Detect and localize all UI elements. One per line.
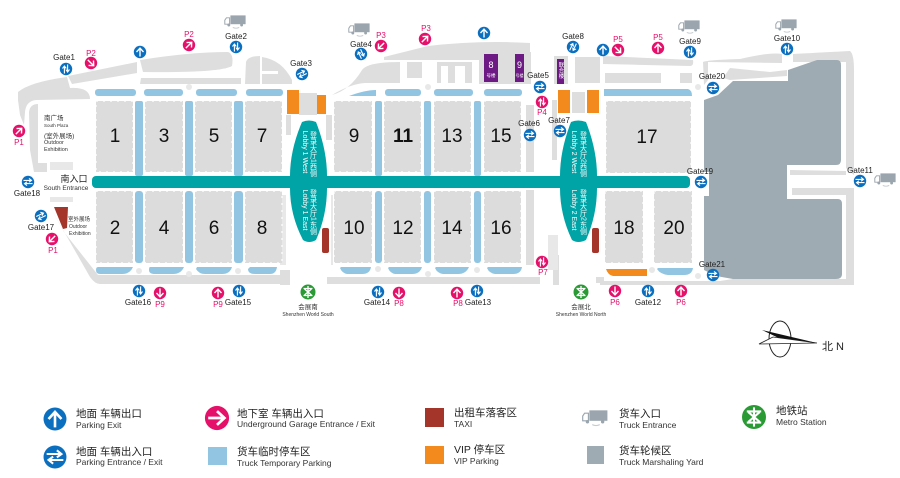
legend: parking exit: Parking Exit bbox=[76, 420, 122, 430]
purple building label bbox=[557, 59, 564, 84]
hall 13 bbox=[434, 101, 471, 172]
outdoor exhibition label: 室外展场 bbox=[68, 215, 91, 223]
garage P2 bbox=[180, 30, 198, 54]
compass: 北 N bbox=[822, 340, 844, 353]
legend: VIP parking bbox=[425, 443, 505, 466]
gate 18: Gate18 bbox=[14, 189, 41, 198]
south plaza label: (室外展场) bbox=[44, 131, 74, 140]
legend: VIP parking: VIP 停车区 bbox=[454, 443, 505, 456]
lobby 1 west label bbox=[301, 130, 317, 178]
gate 4: Gate4 bbox=[350, 40, 372, 49]
gate 15: Gate15 bbox=[225, 298, 252, 307]
garage P9: P9 bbox=[213, 300, 223, 309]
garage P6 bbox=[675, 285, 687, 307]
garage P1 bottom: P1 bbox=[48, 246, 58, 255]
gate 16: Gate16 bbox=[125, 298, 152, 307]
south plaza label: Outdoor bbox=[44, 140, 64, 146]
purple building 9 bbox=[515, 54, 524, 82]
legend: parking entrance exit: Parking Entrance / Exit bbox=[76, 457, 163, 467]
hall numbers: 1 bbox=[110, 126, 120, 147]
outdoor exhibition label bbox=[68, 215, 91, 237]
legend: truck entrance bbox=[583, 407, 677, 430]
outdoor exhibition label: Outdoor bbox=[69, 224, 87, 230]
gate 10: Gate10 bbox=[774, 34, 801, 43]
hall numbers: 17 bbox=[636, 127, 658, 148]
hall numbers: 16 bbox=[490, 218, 512, 239]
garage P3 bbox=[372, 31, 390, 55]
hall 3 bbox=[145, 101, 183, 172]
hall 10 bbox=[334, 191, 372, 263]
lobby 2 east label: 登录大厅2东侧 bbox=[580, 188, 587, 236]
truck temporary parking strips bbox=[95, 89, 693, 275]
hall numbers: 7 bbox=[257, 126, 267, 147]
garage P6: P6 bbox=[676, 298, 686, 307]
legend: metro station: 地铁站 bbox=[776, 404, 808, 417]
metro north: Shenzhen World North bbox=[556, 312, 606, 318]
gate 8: Gate8 bbox=[562, 32, 584, 41]
hall 8 bbox=[245, 191, 282, 263]
gate 20 bbox=[699, 72, 726, 94]
gate 6: Gate6 bbox=[518, 119, 540, 128]
purple building 8: 8 bbox=[488, 60, 494, 70]
hall numbers: 11 bbox=[393, 126, 413, 147]
gate 12 bbox=[635, 285, 662, 307]
garage P7: P7 bbox=[538, 268, 548, 277]
lobby 2 west label bbox=[570, 130, 587, 178]
gate 19: Gate19 bbox=[687, 167, 714, 176]
legend: metro station: Metro Station bbox=[776, 417, 827, 427]
gate 2: Gate2 bbox=[225, 32, 247, 41]
garage P9: P9 bbox=[155, 300, 165, 309]
garage P4 bbox=[536, 96, 548, 117]
hall 18 bbox=[605, 191, 643, 263]
hall numbers: 8 bbox=[257, 218, 267, 239]
metro north: 会展北 bbox=[571, 302, 591, 311]
lobby 1 east label: Lobby 1 East bbox=[301, 190, 308, 230]
gate 15 bbox=[225, 285, 252, 307]
hall 6 bbox=[195, 191, 232, 263]
gate 14 bbox=[364, 286, 391, 307]
garage P8 bbox=[451, 287, 463, 308]
hall 4 bbox=[145, 191, 183, 263]
south entrance label: South Entrance bbox=[44, 185, 89, 192]
gate 10 bbox=[774, 34, 801, 55]
gate 9: Gate9 bbox=[679, 37, 701, 46]
taxi areas bbox=[54, 207, 599, 253]
garage P8: P8 bbox=[394, 299, 404, 308]
legend: truck marshaling yard: Truck Marshaling Yard bbox=[619, 457, 704, 467]
legend: taxi: TAXI bbox=[454, 419, 472, 429]
garage P1 top bbox=[10, 122, 28, 147]
lobby 1 west label: Lobby 1 West bbox=[301, 131, 308, 173]
metro south bbox=[282, 284, 334, 318]
hall 16 bbox=[484, 191, 521, 263]
legend: VIP parking: VIP Parking bbox=[454, 456, 499, 466]
gate 3 bbox=[290, 59, 312, 82]
gate 2 bbox=[225, 32, 247, 53]
garage P9 bbox=[212, 287, 224, 309]
hall 15 bbox=[484, 101, 521, 172]
truck marshaling yard bbox=[704, 60, 842, 279]
hall 7 bbox=[245, 101, 282, 172]
hall numbers: 20 bbox=[663, 218, 685, 239]
hall numbers: 12 bbox=[392, 218, 414, 239]
south entrance label bbox=[44, 173, 89, 192]
legend: truck temporary parking: Truck Temporary Parking bbox=[237, 458, 332, 468]
gate 8 bbox=[562, 32, 584, 55]
gate 1 bbox=[53, 53, 75, 75]
hall numbers: 3 bbox=[159, 126, 169, 147]
hall numbers: 13 bbox=[441, 126, 463, 147]
gate 11: Gate11 bbox=[847, 166, 873, 175]
gate 11 bbox=[847, 166, 873, 187]
hall numbers: 6 bbox=[209, 218, 219, 239]
hall 20 bbox=[654, 191, 692, 263]
hall numbers: 18 bbox=[613, 218, 635, 239]
legend: truck temporary parking bbox=[208, 445, 332, 468]
south plaza label bbox=[44, 113, 74, 153]
gate 13: Gate13 bbox=[465, 298, 492, 307]
gate 1: Gate1 bbox=[53, 53, 75, 62]
gate 5: Gate5 bbox=[527, 71, 549, 80]
metro south: Shenzhen World South bbox=[282, 312, 334, 318]
gate 17: Gate17 bbox=[28, 223, 55, 232]
gate 17 bbox=[28, 208, 55, 232]
lobby 2 west label: Lobby 2 West bbox=[570, 131, 577, 173]
hall 5 bbox=[195, 101, 232, 172]
legend: truck marshaling yard: 货车轮候区 bbox=[619, 444, 672, 457]
garage P3: P3 bbox=[421, 24, 431, 33]
gate 13 bbox=[465, 285, 492, 307]
legend: truck temporary parking: 货车临时停车区 bbox=[237, 445, 310, 458]
garage P2 bbox=[82, 49, 100, 72]
legend: taxi: 出租车落客区 bbox=[454, 406, 517, 419]
garage P6 bbox=[609, 285, 621, 307]
gate 12: Gate12 bbox=[635, 298, 662, 307]
hall numbers: 2 bbox=[110, 218, 120, 239]
purple building label: 联合楼 bbox=[558, 61, 564, 80]
garage P9 bbox=[154, 287, 166, 309]
garage P2: P2 bbox=[86, 49, 96, 58]
garage P7 bbox=[536, 256, 548, 277]
main concourse: teal bar bbox=[92, 176, 690, 188]
hall 11 bbox=[384, 101, 421, 172]
hall 17 bbox=[606, 101, 691, 173]
truck icons bbox=[225, 15, 896, 186]
legend: parking exit bbox=[44, 407, 142, 430]
gate 7 bbox=[548, 116, 570, 137]
hall 14 bbox=[434, 191, 471, 263]
gate 18 bbox=[14, 176, 41, 198]
garage P5 bbox=[609, 35, 627, 59]
gate 3: Gate3 bbox=[290, 59, 312, 68]
garage P3: P3 bbox=[376, 31, 386, 40]
purple building 9: 号楼 bbox=[516, 72, 524, 78]
metro south: 会展南 bbox=[298, 302, 318, 311]
garage P5: P5 bbox=[653, 33, 663, 42]
lobby 2 east label bbox=[570, 188, 587, 236]
hall 2 bbox=[96, 191, 133, 263]
south plaza label: 南广场 bbox=[44, 113, 64, 122]
lobby 1 bbox=[290, 120, 327, 242]
lobby 2 bbox=[560, 120, 597, 242]
south plaza label: Exhibition bbox=[44, 147, 68, 153]
garage P2: P2 bbox=[184, 30, 194, 39]
legend: truck marshaling yard bbox=[587, 444, 704, 467]
legend: underground garage: 地下室 车辆出入口 bbox=[237, 407, 324, 420]
purple building 9: 9 bbox=[517, 60, 522, 70]
purple building 8 bbox=[484, 54, 498, 82]
hall numbers: 15 bbox=[490, 126, 512, 147]
south plaza label: South Plaza bbox=[44, 123, 69, 128]
hall 1 bbox=[96, 101, 133, 172]
legend: parking entrance exit bbox=[44, 445, 163, 468]
garage P6: P6 bbox=[610, 298, 620, 307]
gate 7: Gate7 bbox=[548, 116, 570, 125]
legend: parking exit: 地面 车辆出口 bbox=[76, 407, 142, 420]
metro north bbox=[556, 284, 606, 318]
gate 16 bbox=[125, 285, 152, 307]
garage P1 bottom bbox=[43, 230, 61, 255]
gate 21 bbox=[699, 260, 726, 281]
site map base: grey roads and grounds bbox=[18, 42, 854, 285]
legend: underground garage: Underground Garage Entrance / Exit bbox=[237, 419, 376, 429]
light grey forecourts and junction dots bbox=[50, 84, 701, 279]
hall numbers: 5 bbox=[209, 126, 219, 147]
hall 9 bbox=[334, 101, 372, 172]
garage P4: P4 bbox=[537, 108, 547, 117]
gate 9 bbox=[679, 37, 701, 58]
gate 20: Gate20 bbox=[699, 72, 726, 81]
garage P5 bbox=[652, 33, 664, 54]
gate 21: Gate21 bbox=[699, 260, 726, 269]
gate 6 bbox=[518, 119, 540, 141]
gate 14: Gate14 bbox=[364, 298, 391, 307]
lobby 2 west label: 登录大厅2西侧 bbox=[580, 130, 587, 178]
hall numbers: 9 bbox=[349, 126, 359, 147]
hall 12 bbox=[384, 191, 421, 263]
gate 19 bbox=[687, 167, 714, 188]
garage P5: P5 bbox=[613, 35, 623, 44]
legend: parking entrance exit: 地面 车辆出入口 bbox=[76, 445, 152, 458]
garage P3 bbox=[416, 24, 434, 48]
legend: taxi bbox=[425, 406, 517, 429]
garage P8: P8 bbox=[453, 299, 463, 308]
gate 4 bbox=[350, 40, 372, 62]
legend: underground garage bbox=[205, 406, 376, 430]
legend: metro station bbox=[742, 404, 827, 429]
lobby 1 west label: 登录大厅1西侧 bbox=[310, 130, 317, 178]
hall numbers: 4 bbox=[159, 218, 170, 239]
hall numbers bbox=[110, 126, 685, 239]
south entrance label: 南入口 bbox=[60, 173, 88, 184]
halls bbox=[96, 101, 692, 263]
unnamed blue exits bbox=[134, 27, 609, 58]
hall numbers: 14 bbox=[441, 218, 463, 239]
purple building 8: 号楼 bbox=[486, 72, 496, 79]
outdoor exhibition label: Exhibition bbox=[69, 231, 91, 237]
legend: truck entrance: 货车入口 bbox=[619, 407, 661, 420]
lobby 1 east label: 登录大厅1东侧 bbox=[310, 188, 317, 236]
garage P1 top: P1 bbox=[14, 138, 24, 147]
legend: truck entrance: Truck Entrance bbox=[619, 420, 677, 430]
compass bbox=[759, 321, 844, 357]
lobby 1 east label bbox=[301, 188, 317, 236]
gate 5 bbox=[527, 71, 549, 93]
VIP parking areas bbox=[287, 90, 647, 276]
hall numbers: 10 bbox=[343, 218, 365, 239]
garage P8 bbox=[393, 287, 405, 308]
legend bbox=[44, 404, 827, 468]
lobby 2 east label: Lobby 2 East bbox=[570, 190, 577, 230]
